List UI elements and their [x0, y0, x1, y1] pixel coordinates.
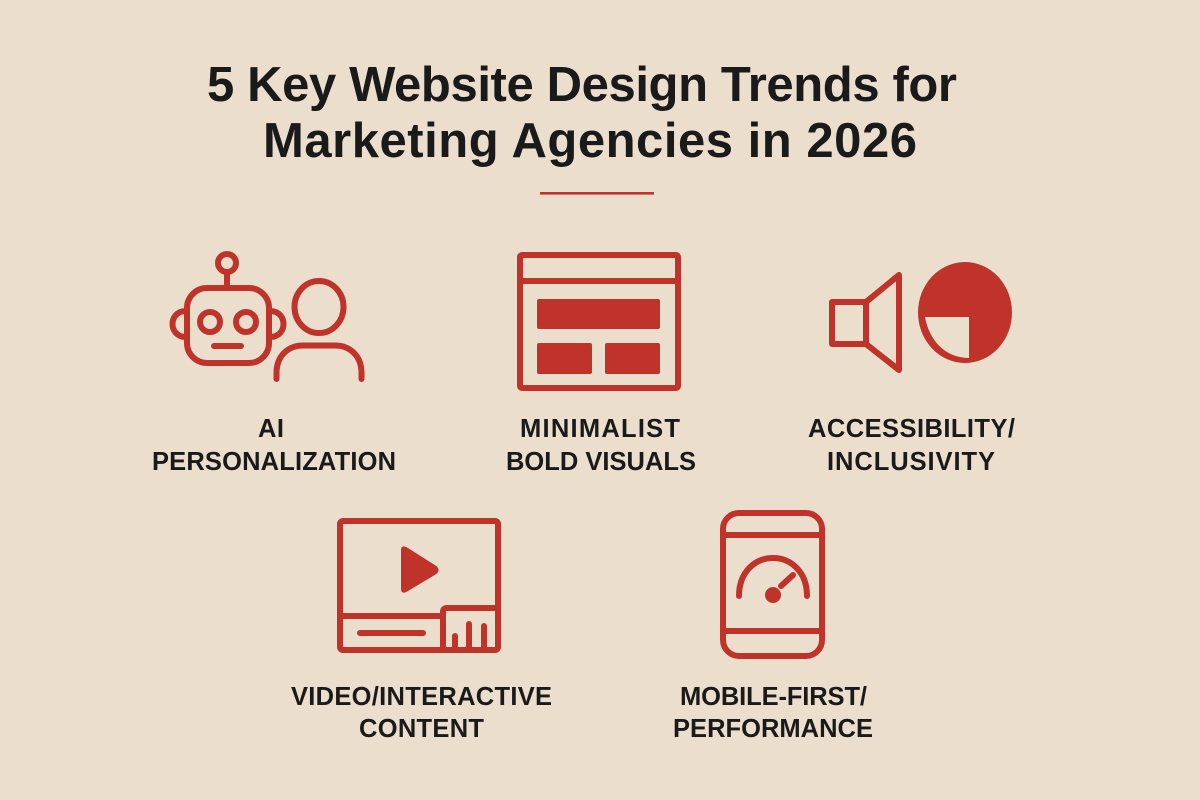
title divider	[540, 192, 654, 195]
label: accessibility and inclusivity: ACCESSIBILITY/	[808, 415, 1015, 443]
label: minimalist bold visuals: BOLD VISUALS	[506, 448, 696, 476]
trend: mobile first and performance	[673, 513, 873, 743]
label: mobile first and performance	[673, 683, 873, 743]
title	[207, 58, 957, 168]
label: AI personalization	[152, 415, 396, 476]
title: Marketing Agencies in 2026	[263, 114, 917, 168]
label: AI personalization: AI	[258, 415, 284, 443]
icon: speaker and contrast circle	[832, 262, 1012, 370]
label: AI personalization: PERSONALIZATION	[152, 448, 396, 476]
label: video and interactive content	[291, 683, 552, 743]
label: video and interactive content: CONTENT	[359, 715, 484, 743]
trend: AI personalization	[152, 254, 396, 476]
icon: phone with speed gauge	[723, 513, 822, 656]
icon: minimalist web layout	[520, 255, 678, 388]
trend: minimalist bold visuals	[506, 255, 696, 476]
label: minimalist bold visuals: MINIMALIST	[520, 415, 680, 443]
trend: video and interactive content	[291, 521, 552, 743]
icon: robot and person	[172, 254, 362, 379]
label: minimalist bold visuals	[506, 415, 696, 476]
label: accessibility and inclusivity	[808, 415, 1015, 476]
label: mobile first and performance: PERFORMANCE	[673, 715, 873, 743]
trend: accessibility and inclusivity	[808, 262, 1015, 476]
title: 5 Key Website Design Trends for	[207, 58, 957, 112]
icon: video player with chart	[340, 521, 498, 650]
label: video and interactive content: VIDEO/INTERACTIVE	[291, 683, 552, 711]
label: accessibility and inclusivity: INCLUSIVITY	[827, 448, 995, 476]
label: mobile first and performance: MOBILE-FIRST/	[680, 683, 867, 711]
